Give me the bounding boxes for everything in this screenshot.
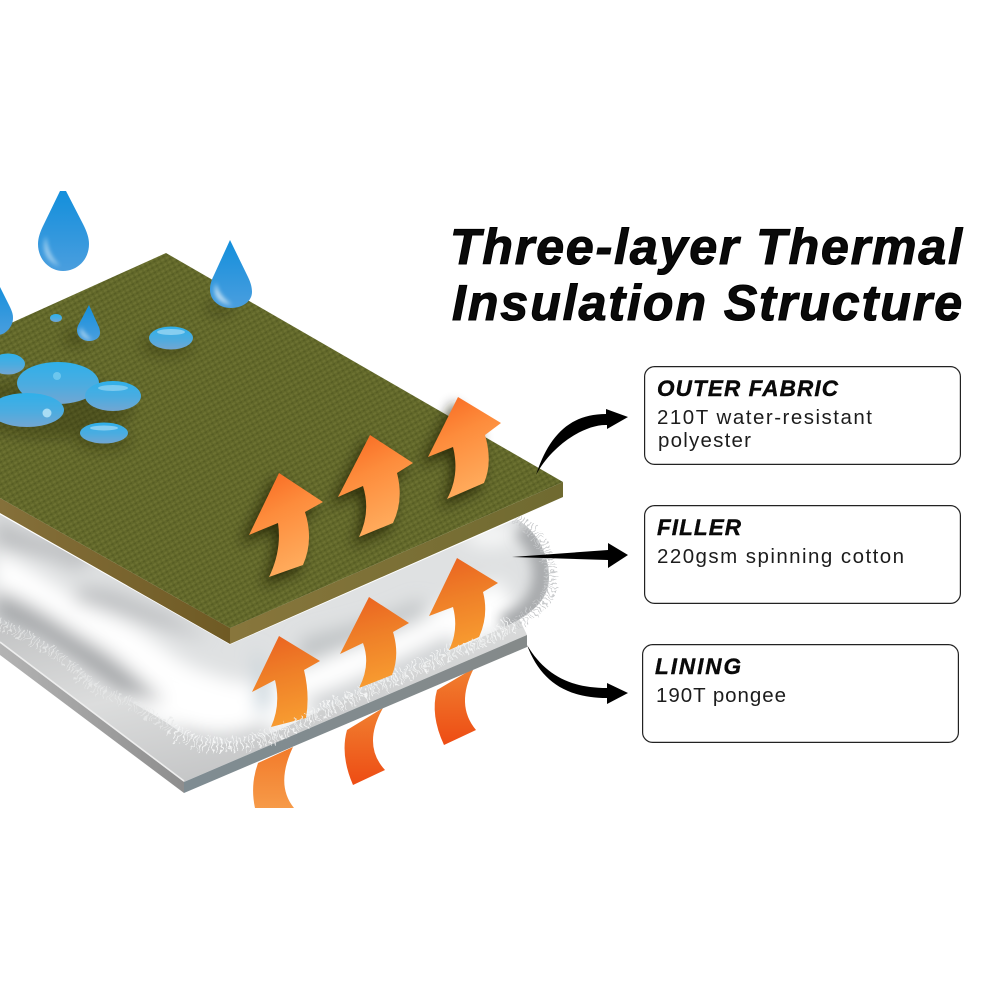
arrow: outer fabric pointer (536, 409, 628, 475)
layered fabric illustration (0, 191, 565, 808)
title: Insulation Structure (452, 275, 962, 331)
description: lining: 190T pongee (656, 684, 786, 707)
heading: filler: FILLER (657, 515, 742, 540)
panel: outer fabric (645, 367, 960, 464)
arrow: lining pointer (527, 645, 628, 704)
infographic canvas (0, 191, 964, 808)
filler cotton layer (0, 514, 549, 744)
panel: lining (643, 645, 958, 742)
lower heat arrows rising through lining (253, 668, 476, 808)
end of filler shading (503, 528, 543, 625)
heading: lining: LINING (655, 654, 741, 679)
upper heat arrows on fabric (249, 397, 501, 577)
falling water drops (0, 191, 252, 341)
description: filler: 220gsm spinning cotton (657, 545, 904, 568)
description: outer fabric (657, 406, 872, 452)
title (450, 219, 963, 331)
middle heat arrows (252, 558, 498, 727)
water drop large (38, 191, 89, 271)
description: outer fabric: 210T water-resistant (657, 406, 872, 429)
title: Three-layer Thermal (450, 219, 963, 275)
description: outer fabric: polyester (658, 429, 751, 452)
panel: filler (645, 506, 960, 603)
filler fibres along lower and right edge (0, 518, 551, 746)
lining layer plate (0, 600, 527, 793)
outer fabric layer (0, 253, 563, 644)
shadows on fabric (0, 302, 483, 586)
water drop left edge (0, 283, 13, 335)
water drop right (210, 240, 252, 308)
arrow: filler pointer (512, 543, 628, 568)
water drop small (77, 305, 100, 341)
heading: outer fabric: OUTER FABRIC (657, 376, 839, 401)
water beads on fabric (0, 314, 193, 444)
fibres over middle arrow tips (262, 626, 515, 738)
